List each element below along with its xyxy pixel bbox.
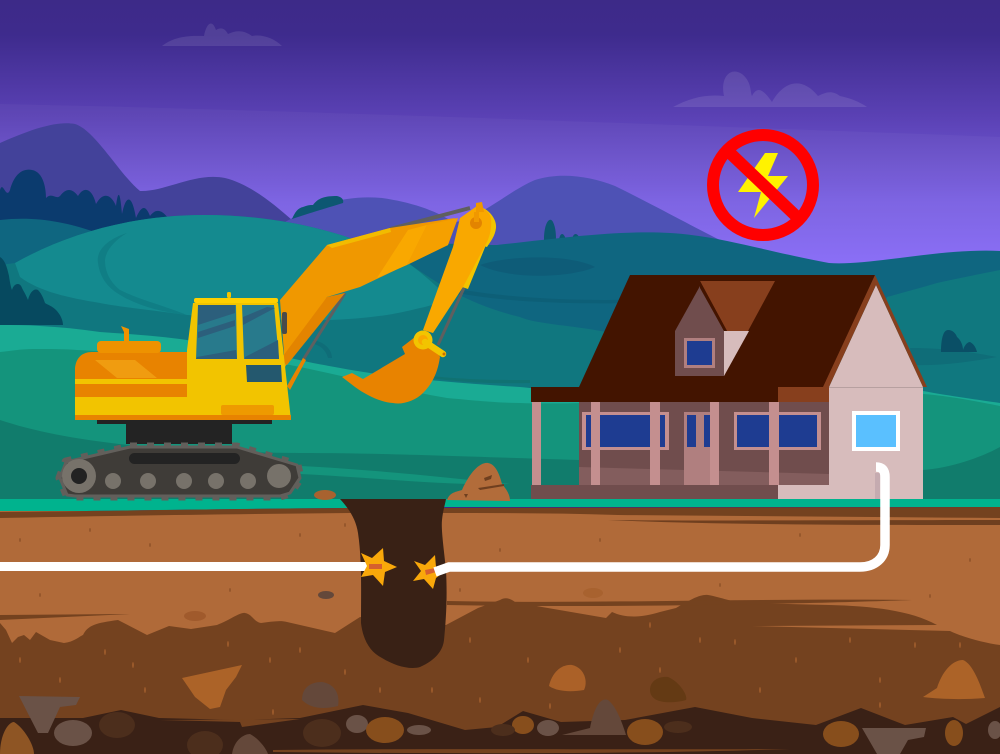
trees: left navy treeline [0,170,180,240]
ground surface grass [0,499,1000,512]
house: porch base [531,485,778,499]
sky [0,0,1000,290]
green foreground hills [0,325,1000,505]
excavator: stick arm [423,202,496,333]
house: porch wall [579,402,829,485]
excavator: bucket [342,337,440,404]
house: gable trim [823,275,927,387]
house: roof [579,275,875,387]
house: right window [734,412,821,450]
clouds [162,23,867,107]
far mountains [0,123,720,290]
rock: orange angular [182,665,242,709]
rocks in soil [0,588,1000,754]
excavator: track wheels [62,459,291,493]
trees: left foreground bushes [0,257,63,325]
dirt pile [447,463,510,501]
excavator: engine hood [75,326,190,420]
main teal hill [0,215,640,500]
bedrock layer [0,705,1000,754]
trees: right bush [941,330,977,352]
rock: topsoil pebbles [184,588,603,621]
topsoil layer [0,511,1000,754]
soil seam strips [0,600,912,620]
excavator: cab windows [196,305,282,382]
back hills [0,219,1000,500]
soil speckles [19,622,961,715]
house: dormer [675,281,775,376]
dark soil wedge [608,520,1000,525]
house: left window [582,412,669,450]
dirt clump [314,490,336,500]
spark: right break [413,555,448,589]
right hill [800,270,1000,500]
rock: orange oval [549,665,586,691]
dark soil strip [0,507,1000,518]
excavator: cab [75,292,291,420]
excavator: track [60,447,300,496]
excavator: boom [280,218,458,390]
house: porch beam [531,387,923,402]
trees: small teal bushes [292,196,580,240]
house: gable wall [778,285,923,499]
spark: left break [361,548,397,586]
rock: dark oval [650,677,686,702]
icon: prohibition ring [713,135,813,235]
icon: lightning bolt [738,153,788,218]
house: lit window [852,411,900,451]
rock: orange cone [923,660,985,699]
excavator: cylinder rods [303,208,470,360]
deep soil layer [0,595,1000,754]
no electricity symbol [713,135,813,235]
excavator: chassis [97,420,272,444]
broken power line: left section [0,562,370,571]
broken power line: right section to house [435,467,885,572]
excavated trench [340,499,447,668]
house: porch posts [532,398,779,485]
rock: grey oval [302,682,338,708]
house [531,275,927,499]
rock: bedrock stones [0,700,1000,754]
house: door [684,412,719,485]
rock: grey funnel left [19,696,80,733]
excavator: bucket link [414,330,446,356]
excavator [60,202,496,496]
bedrock seams [160,719,790,753]
